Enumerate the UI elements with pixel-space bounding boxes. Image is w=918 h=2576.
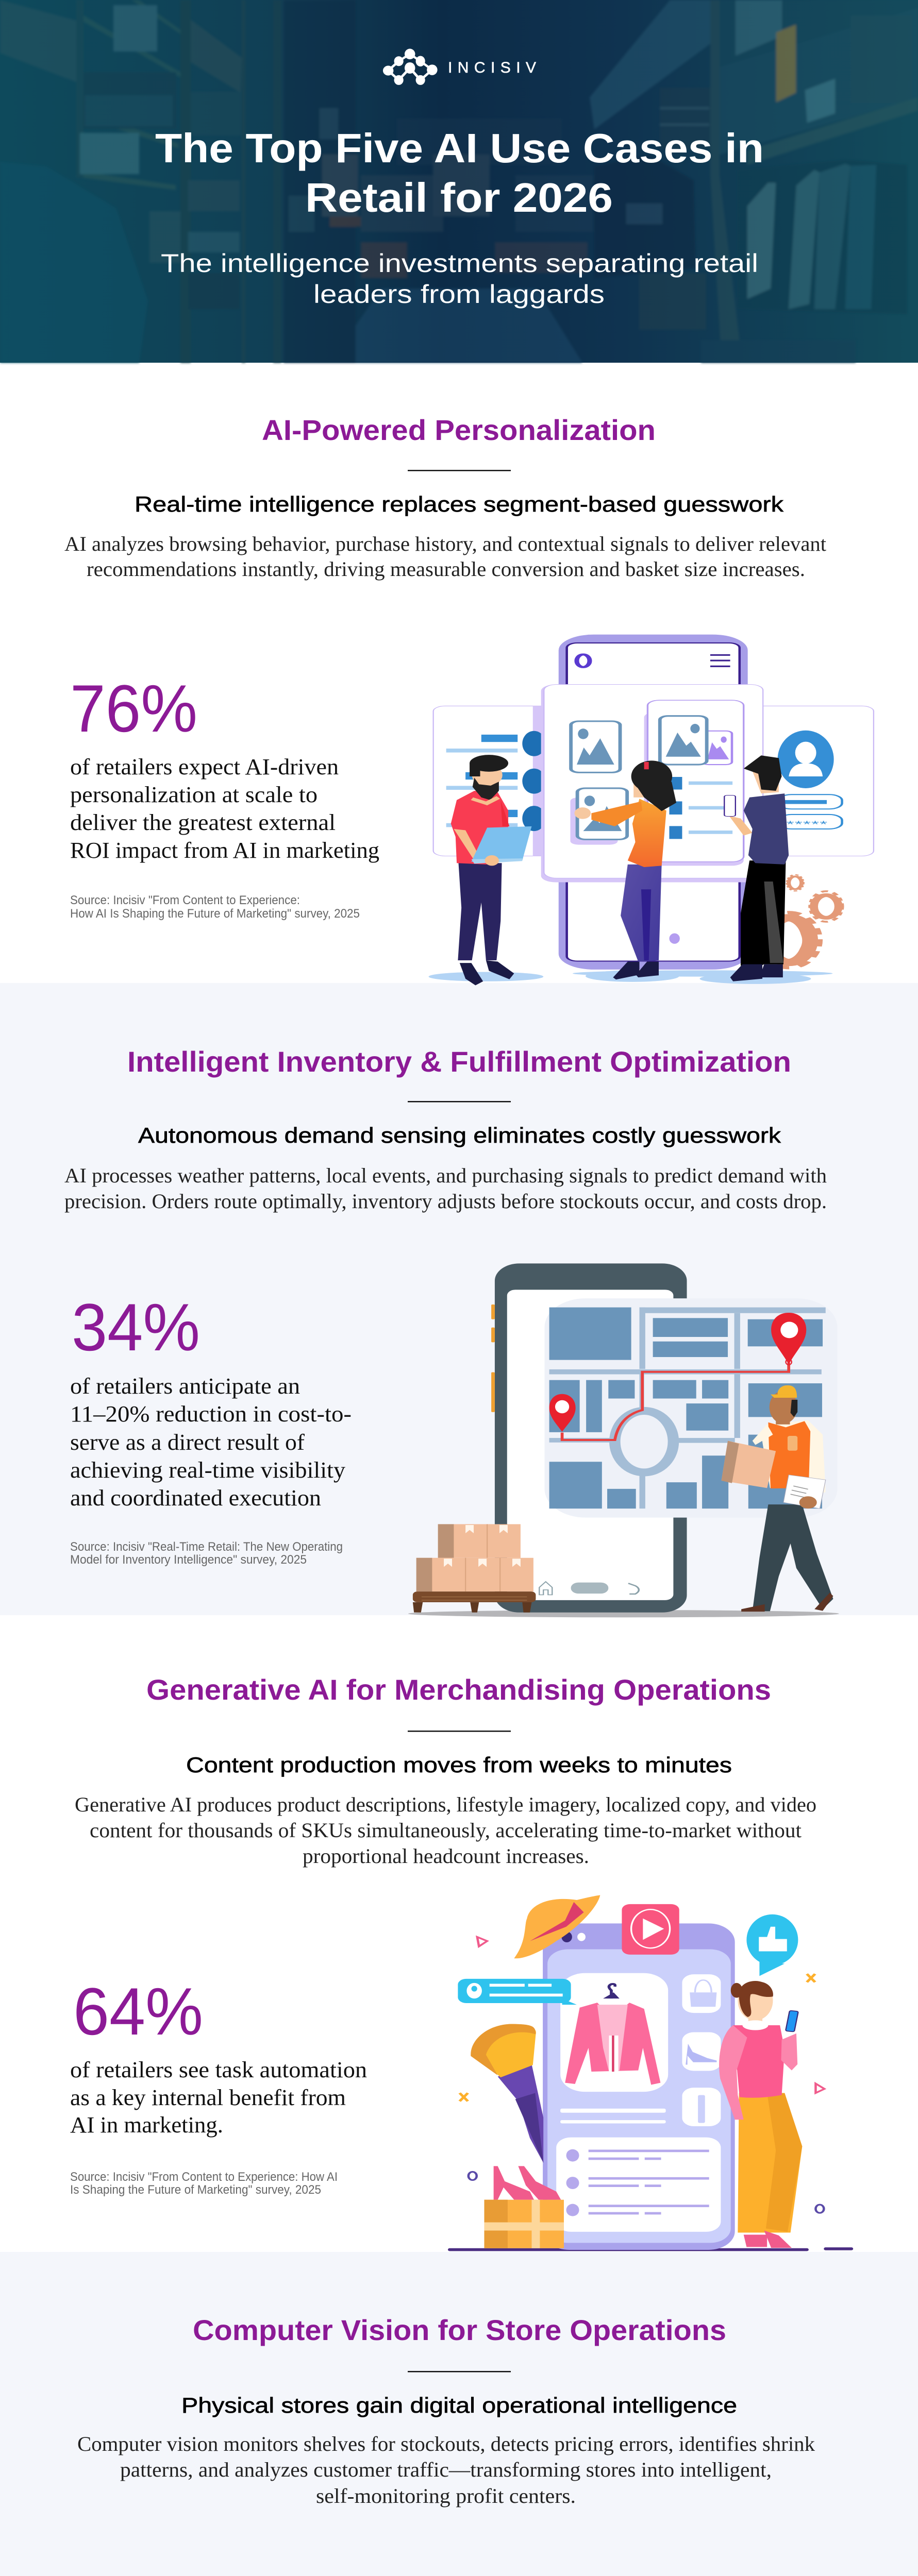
statistic description: AI in marketing. <box>70 2112 223 2138</box>
statistic description: of retailers see task automation <box>70 2057 367 2082</box>
source: Source: Incisiv "From Content to Experience: <box>70 893 300 907</box>
heading: Computer Vision for Store Operations <box>193 2314 726 2346</box>
statistic description: deliver the greatest external <box>70 810 336 835</box>
source: Source: Incisiv "Real-Time Retail: The New Operating <box>70 1540 343 1554</box>
subheading: Content production moves from weeks to minutes <box>186 1753 732 1777</box>
statistic: 34%: 34% <box>72 1290 200 1365</box>
subtitle <box>161 249 758 309</box>
description <box>64 1164 827 1213</box>
statistic description <box>70 754 379 863</box>
description: AI analyzes browsing behavior, purchase history, and contextual signals to deliver relevant <box>64 532 826 555</box>
illustration: delivery worker, phone map and parcels <box>408 1263 839 1617</box>
statistic description: 11–20% reduction in cost-to- <box>70 1401 352 1427</box>
main title <box>155 125 764 221</box>
description: AI processes weather patterns, local events, and purchasing signals to predict demand with <box>64 1164 827 1187</box>
statistic description: ROI impact from AI in marketing <box>70 838 379 863</box>
description <box>77 2432 815 2507</box>
source: Model for Inventory Intelligence" survey, 2025 <box>70 1553 307 1567</box>
illustration: shopping app with fashion products <box>448 1895 853 2251</box>
description: recommendations instantly, driving measurable conversion and basket size increases. <box>87 557 805 581</box>
heading: Generative AI for Merchandising Operations <box>146 1673 771 1706</box>
description: self-monitoring profit centers. <box>316 2484 576 2507</box>
source <box>70 2170 338 2197</box>
statistic description: achieving real-time visibility <box>70 1458 345 1483</box>
panel: AI-powered personalization <box>0 363 918 985</box>
statistic description: of retailers anticipate an <box>70 1374 300 1399</box>
statistic description: serve as a direct result of <box>70 1430 305 1455</box>
source: How AI Is Shaping the Future of Marketing" survey, 2025 <box>70 907 360 921</box>
statistic description: personalization at scale to <box>70 782 318 807</box>
panel: computer vision for store operations <box>0 2252 918 2576</box>
description: proportional headcount increases. <box>303 1844 589 1868</box>
source <box>70 893 360 921</box>
statistic description <box>70 1374 352 1511</box>
panel: generative AI for merchandising operations <box>0 1615 918 2252</box>
source: Source: Incisiv "From Content to Experience: How AI <box>70 2170 338 2184</box>
illustration: team arranging a personalized app interface <box>429 635 874 985</box>
heading: AI-Powered Personalization <box>262 414 656 446</box>
hero background: store interior <box>0 0 918 363</box>
hero banner <box>0 0 918 363</box>
description <box>64 532 826 581</box>
logo: INCISIV <box>448 59 536 76</box>
main title: The Top Five AI Use Cases in <box>155 125 764 171</box>
illustration: team arranging a personalized app interface: ***** <box>787 819 828 829</box>
subheading: Real-time intelligence replaces segment-based guesswork <box>135 492 784 516</box>
description: Generative AI produces product descriptions, lifestyle imagery, localized copy, and video <box>75 1793 816 1816</box>
description: Computer vision monitors shelves for stockouts, detects pricing errors, identifies shrink <box>77 2432 815 2455</box>
description: patterns, and analyzes customer traffic—transforming stores into intelligent, <box>120 2458 772 2481</box>
subheading: Autonomous demand sensing eliminates costly guesswork <box>138 1123 781 1147</box>
subtitle: leaders from laggards <box>313 280 605 309</box>
description: content for thousands of SKUs simultaneously, accelerating time-to-market without <box>90 1819 802 1842</box>
subtitle: The intelligence investments separating retail <box>161 249 758 278</box>
source <box>70 1540 343 1567</box>
statistic description: and coordinated execution <box>70 1485 321 1511</box>
statistic: 76%: 76% <box>70 671 197 746</box>
statistic description: as a key internal benefit from <box>70 2085 346 2110</box>
description <box>75 1793 816 1868</box>
heading: Intelligent Inventory & Fulfillment Optimization <box>127 1045 791 1078</box>
main title: Retail for 2026 <box>305 175 613 221</box>
source: Is Shaping the Future of Marketing" survey, 2025 <box>70 2183 321 2197</box>
description: precision. Orders route optimally, inventory adjusts before stockouts occur, and costs drop. <box>64 1190 827 1213</box>
logo <box>383 49 536 85</box>
statistic: 64%: 64% <box>73 1974 203 2049</box>
panel: intelligent inventory and fulfillment optimization <box>0 983 918 1617</box>
subheading: Physical stores gain digital operational intelligence <box>181 2393 737 2417</box>
statistic description: of retailers expect AI-driven <box>70 754 339 779</box>
statistic description <box>70 2057 367 2138</box>
